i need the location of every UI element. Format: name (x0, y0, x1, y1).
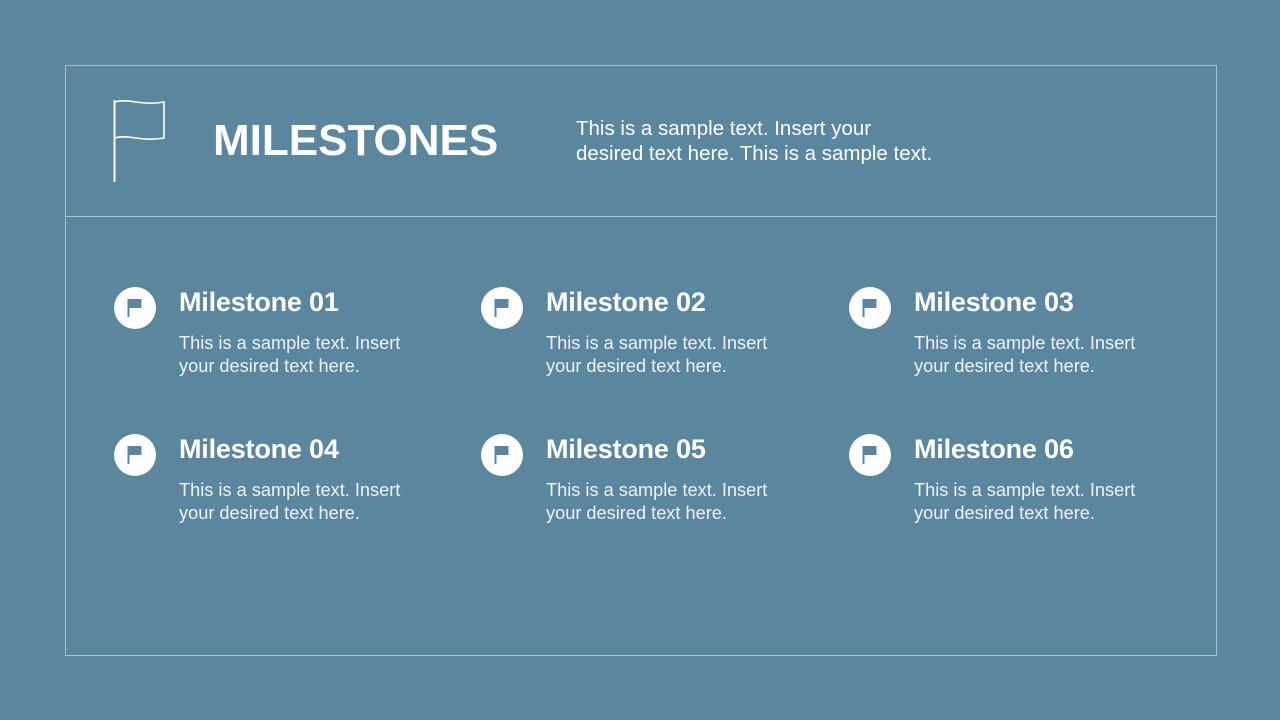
text (179, 333, 400, 376)
text: This is a sample text. Insert (546, 333, 767, 353)
milestone 03 (849, 287, 1136, 376)
text: your desired text here. (914, 503, 1095, 523)
milestone 01 (114, 287, 400, 376)
text: This is a sample text. Insert (546, 480, 767, 500)
icon: header flag (114, 100, 165, 182)
text: This is a sample text. Insert (179, 333, 400, 353)
heading: Milestone 06 (914, 434, 1074, 464)
heading: Milestone 02 (546, 287, 706, 317)
header text (576, 117, 932, 165)
text (914, 333, 1136, 376)
title: MILESTONES (213, 116, 498, 165)
header text: desired text here. This is a sample text. (576, 142, 932, 165)
text: your desired text here. (546, 356, 727, 376)
text (546, 333, 768, 376)
text (179, 480, 400, 523)
icon: flag circle (849, 287, 891, 329)
frame (65, 65, 1217, 656)
heading: Milestone 04 (179, 434, 339, 464)
text: your desired text here. (179, 356, 360, 376)
heading: Milestone 03 (914, 287, 1074, 317)
heading: Milestone 05 (546, 434, 706, 464)
icon: flag circle (114, 434, 156, 476)
text (914, 480, 1136, 523)
text: your desired text here. (546, 503, 727, 523)
milestone 05 (481, 434, 768, 523)
icon: flag circle (481, 434, 523, 476)
header text: This is a sample text. Insert your (576, 117, 871, 140)
milestone 04 (114, 434, 400, 523)
text: your desired text here. (179, 503, 360, 523)
icon: flag circle (114, 287, 156, 329)
text: This is a sample text. Insert (914, 480, 1135, 500)
icon: flag circle (481, 287, 523, 329)
milestone 02 (481, 287, 768, 376)
icon: flag circle (849, 434, 891, 476)
milestone 06 (849, 434, 1136, 523)
text (546, 480, 768, 523)
text: This is a sample text. Insert (914, 333, 1135, 353)
text: This is a sample text. Insert (179, 480, 400, 500)
text: your desired text here. (914, 356, 1095, 376)
heading: Milestone 01 (179, 287, 339, 317)
